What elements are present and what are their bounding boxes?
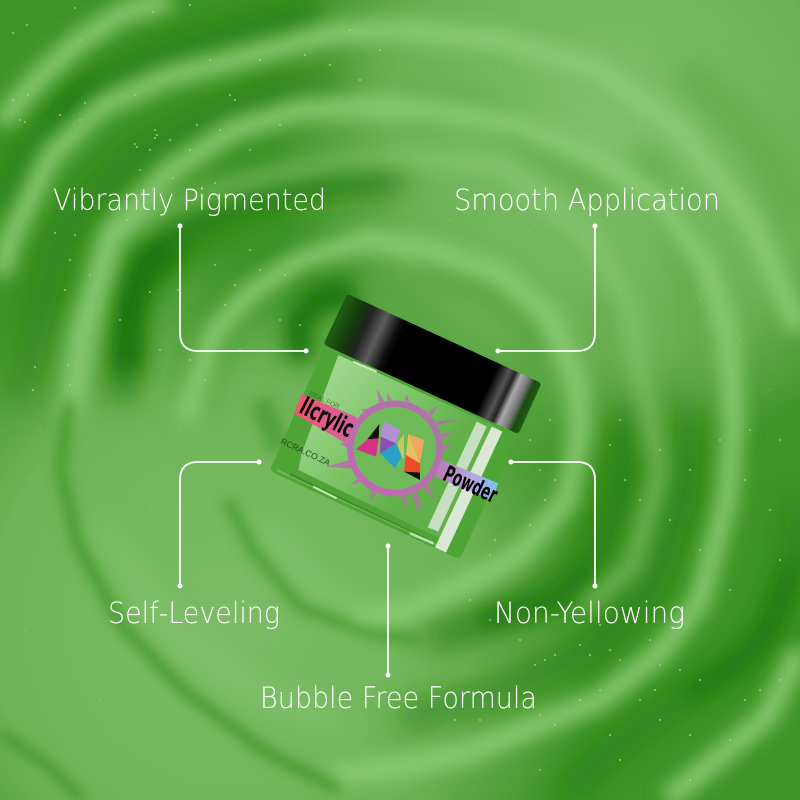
white label strips [428,422,502,553]
product jar [271,295,541,558]
powder band [435,460,502,509]
callout: Self-Leveling: Self-Leveling [108,596,280,630]
callout: Non-Yellowing: Non-Yellowing [494,596,685,630]
callout: Vibrantly Pigmented: Vibrantly Pigmented [53,183,326,217]
callout: Bubble Free Formula [260,544,537,715]
logo splash ring [327,388,457,516]
callout: Vibrantly Pigmented [53,183,326,354]
product jar: RCRA.CO.ZA [279,436,332,468]
powder band: Powder [439,461,502,509]
acrylic band [294,392,359,443]
acrylic band: lIcrylic [295,392,359,443]
lid [324,295,541,433]
jar label text: REAL FOR [307,390,341,411]
callout: Self-Leveling [108,460,280,630]
logo [356,422,424,480]
callout: Bubble Free Formula: Bubble Free Formula [260,681,537,715]
jar glass body [271,345,518,558]
soft dark creases lower left [0,400,420,800]
pale shading bands upper right [400,67,800,410]
pale wash lower left [100,520,390,730]
callout: Smooth Application [454,183,720,354]
callout: Non-Yellowing [494,460,685,630]
callout: Smooth Application: Smooth Application [454,183,720,217]
